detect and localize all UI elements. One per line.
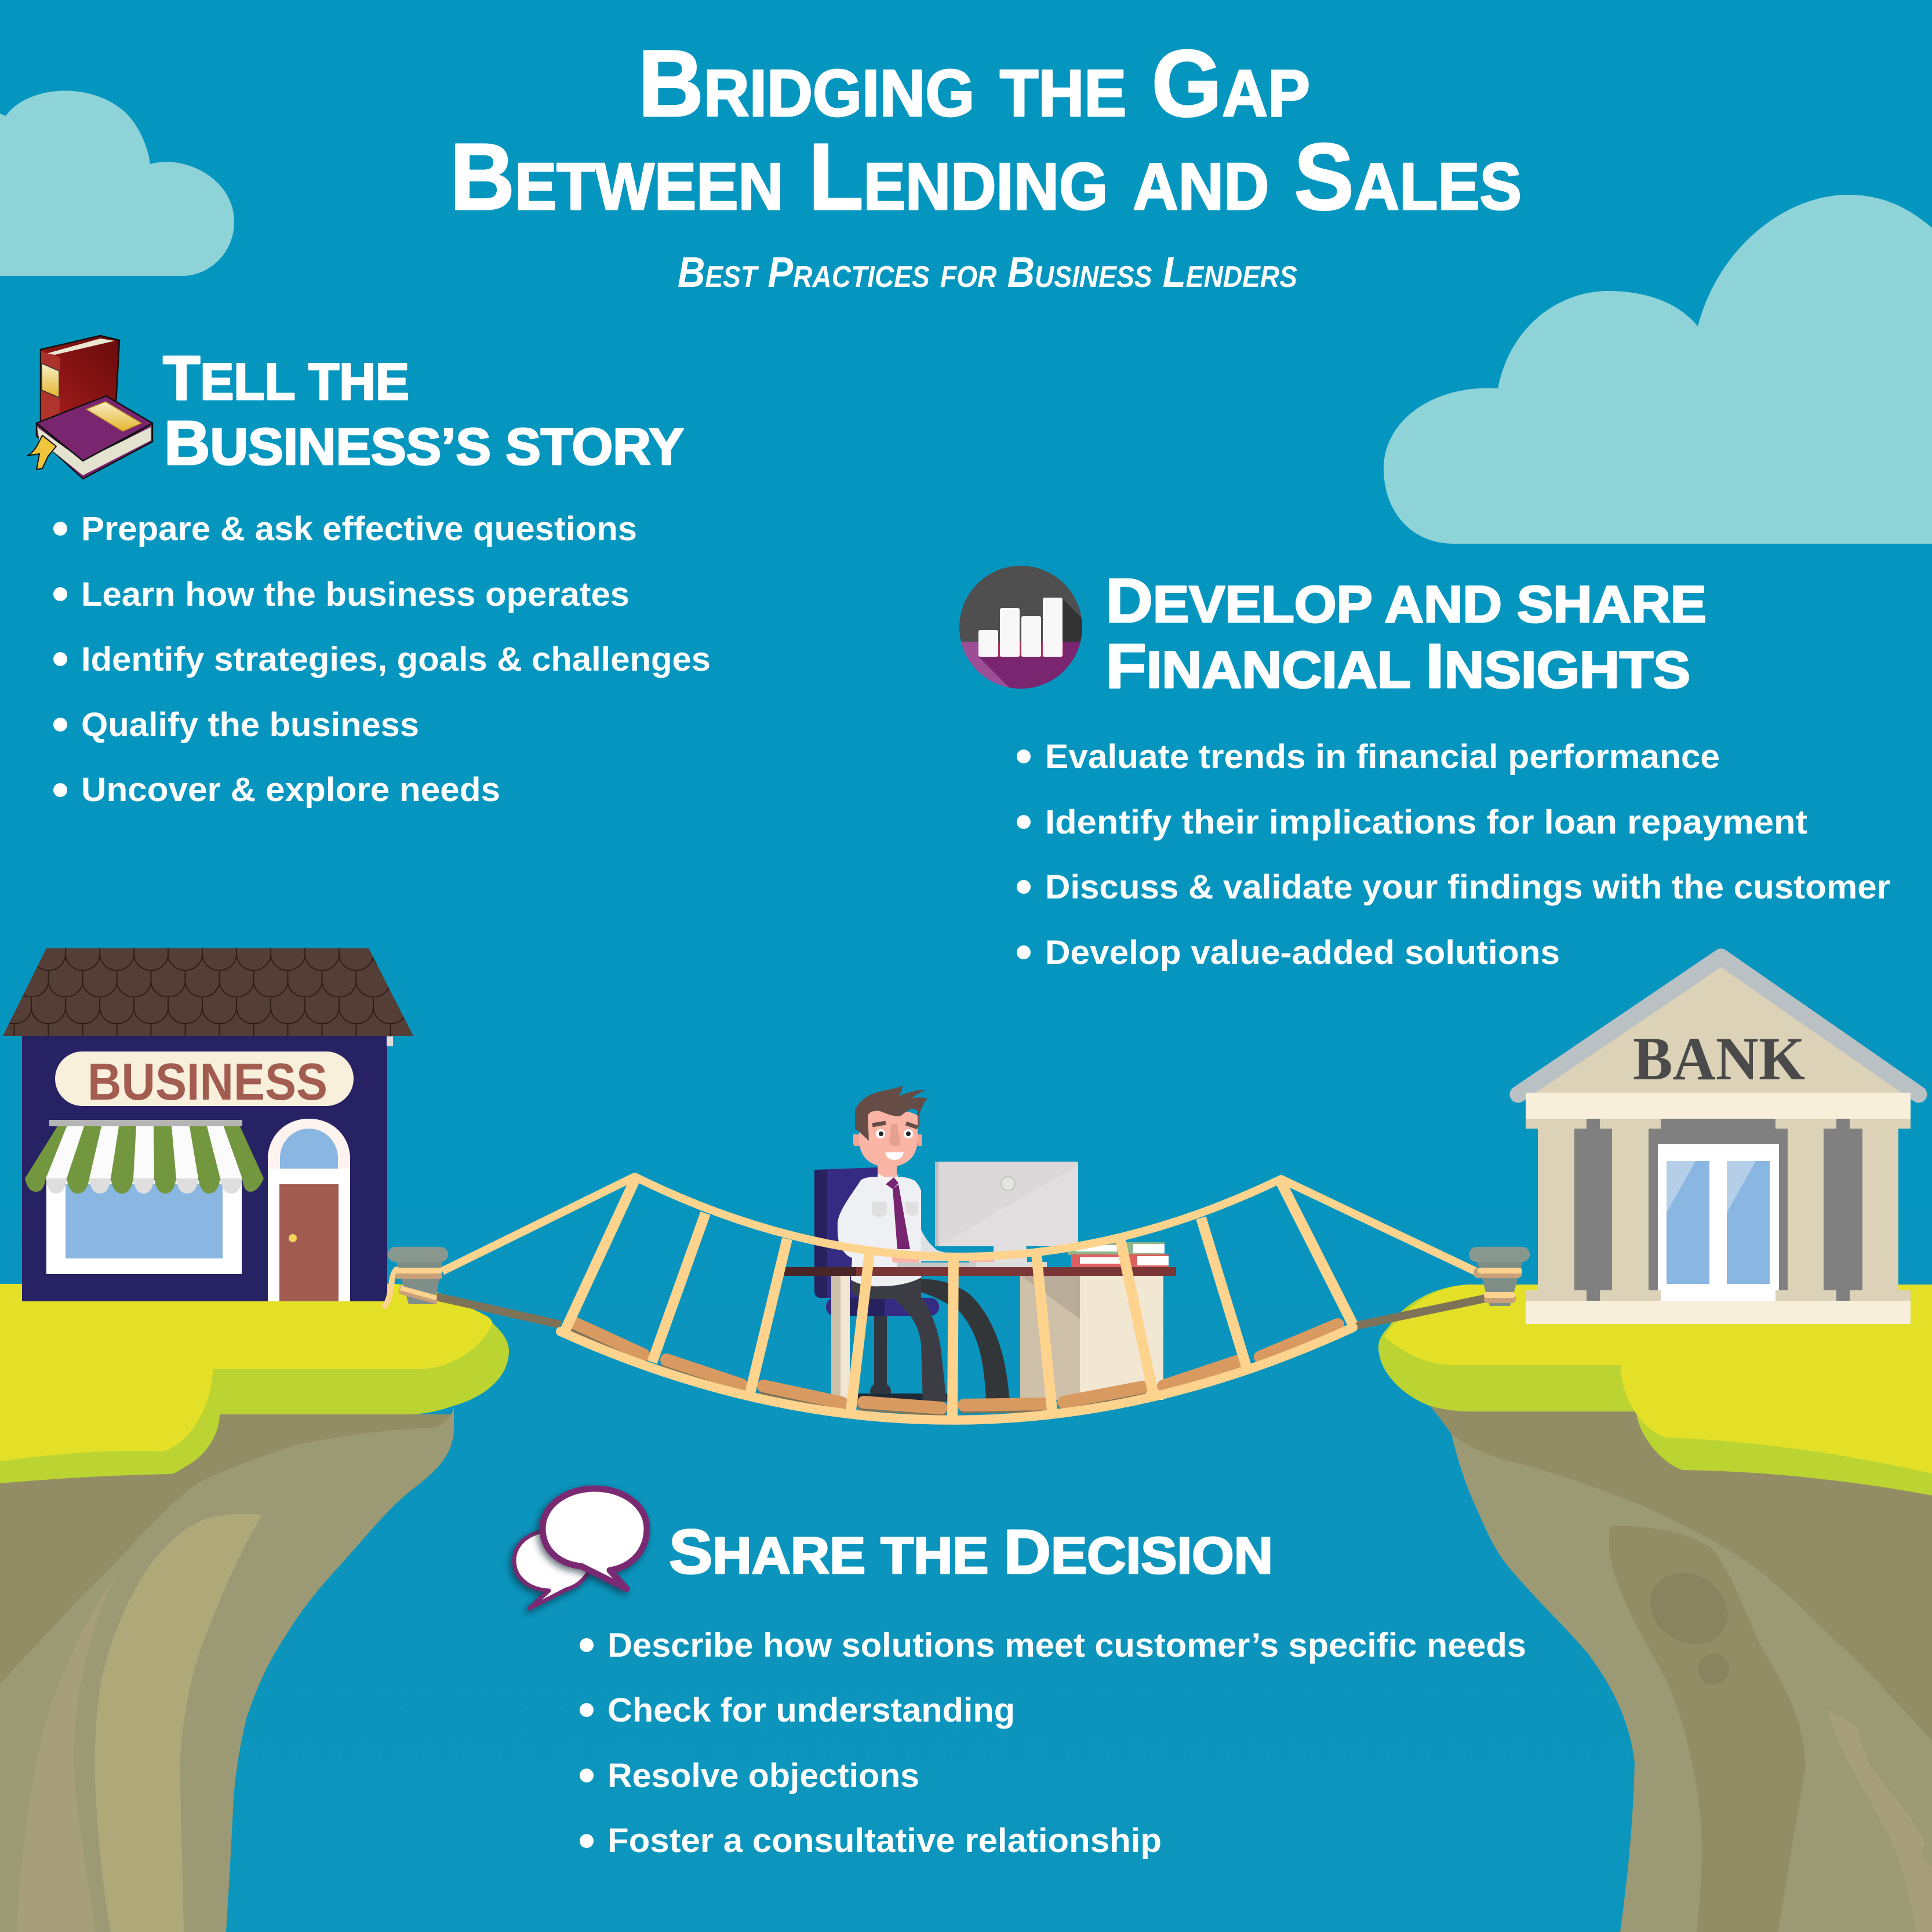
- bullet list: tell the business's story: Learn how the business operates: [81, 576, 630, 613]
- face: [859, 1110, 918, 1167]
- right post bindings: [1473, 1268, 1522, 1303]
- heading: tell the business's story: [163, 343, 684, 478]
- bullet list: share the decision: [580, 1627, 1526, 1860]
- bottom cable: [561, 1327, 1353, 1420]
- bullet list: tell the business's story: Identify strategies, goals & challenges: [81, 641, 711, 678]
- cliff streak: [1828, 1710, 1932, 1932]
- heading: tell the business's story: TELL THE: [163, 343, 409, 413]
- awning: [25, 1120, 264, 1194]
- bullet list: tell the business's story: [53, 510, 711, 809]
- left mooring post: [388, 1247, 448, 1304]
- lower guy ropes: [436, 1297, 1485, 1326]
- dark rock band: [1609, 1526, 1805, 1932]
- books on desk: [1068, 1242, 1169, 1267]
- smile: [885, 1152, 904, 1160]
- base step: [1526, 1301, 1911, 1324]
- icon: speech bubbles: [514, 1489, 647, 1609]
- grass top: [1384, 1285, 1932, 1473]
- heading: tell the business's story: BUSINESS’S STORY: [164, 407, 684, 478]
- bullet list: financial insights: [1017, 738, 1890, 972]
- hands: [892, 1254, 994, 1262]
- tie: [886, 1177, 910, 1249]
- roof: [1518, 957, 1919, 1094]
- subtitle: Best Practices for Business Lenders: [678, 248, 1297, 296]
- hair: [855, 1086, 927, 1141]
- red book: [41, 336, 119, 421]
- right cliff: [1378, 1285, 1932, 1932]
- grass shadow: [1378, 1285, 1932, 1496]
- heading: develop and share financial insights: [1105, 565, 1707, 701]
- shop window: [46, 1180, 242, 1274]
- forearm: [893, 1229, 980, 1261]
- desk pedestal: [1020, 1275, 1163, 1400]
- title: [450, 30, 1522, 230]
- right mooring post: [1469, 1247, 1530, 1306]
- heading: share the decision: SHARE THE DECISION: [669, 1516, 1273, 1587]
- entablature: [1526, 1093, 1911, 1119]
- left post bindings: [385, 1268, 442, 1306]
- cliff highlight: [95, 1514, 262, 1932]
- pockets: [872, 1202, 918, 1218]
- roof: [3, 948, 413, 1036]
- grass shadow: [0, 1284, 509, 1483]
- eyebrows: [872, 1123, 918, 1127]
- shirt: [838, 1177, 921, 1286]
- purple book: [37, 423, 152, 479]
- business building: BUSINESS: [88, 1053, 328, 1111]
- bank sign: BANK: [1633, 1025, 1805, 1093]
- icon: books: [27, 336, 152, 479]
- cloud: top left: [0, 90, 234, 276]
- heading: develop and share financial insights: FINANCIAL INSIGHTS: [1105, 631, 1690, 701]
- rock hole small: [1698, 1654, 1729, 1685]
- bullet list: financial insights: Identify their implications for loan repayment: [1045, 803, 1807, 841]
- title: Bridging the Gap: [638, 30, 1310, 136]
- top cable: [442, 1177, 1475, 1271]
- wall: [22, 1036, 387, 1301]
- heading: develop and share financial insights: DEVELOP AND SHARE: [1105, 565, 1707, 635]
- bullet list: financial insights: Discuss & validate your findings with the customer: [1045, 868, 1890, 906]
- desk top: [784, 1267, 1176, 1276]
- bookmark: [27, 435, 56, 470]
- icon: bar chart circle: [956, 566, 1087, 694]
- rock hole large: [1637, 1559, 1741, 1658]
- bullet list: financial insights: Develop value-added solutions: [1045, 934, 1560, 972]
- grass top: [0, 1284, 492, 1461]
- trousers: [851, 1278, 1010, 1402]
- bullet list: financial insights: Evaluate trends in financial performance: [1045, 738, 1720, 776]
- ears: [853, 1134, 922, 1146]
- cliff lighter face: [0, 1407, 454, 1932]
- pediment: [1522, 960, 1916, 1097]
- bullet list: tell the business's story: Qualify the business: [81, 706, 419, 744]
- business building: [3, 948, 413, 1301]
- cliff rock base: [0, 1414, 454, 1932]
- cloud: top right: [1384, 195, 1932, 544]
- businessman at desk: [784, 1086, 1176, 1402]
- cliff streak: [17, 1577, 115, 1932]
- bank building: [1518, 957, 1919, 1324]
- monitor: [897, 1162, 1078, 1267]
- rope bridge: [385, 1177, 1530, 1421]
- bullet list: share the decision: Check for understanding: [607, 1691, 1015, 1729]
- neck and collar: [878, 1164, 897, 1177]
- left column: [1574, 1119, 1612, 1301]
- bullet list: share the decision: Foster a consultative relationship: [607, 1822, 1162, 1860]
- vertical ropes: [565, 1180, 1353, 1421]
- nose: [889, 1124, 900, 1146]
- chair: [814, 1167, 948, 1402]
- left cliff: [0, 1284, 509, 1932]
- doorway: [1649, 1119, 1788, 1290]
- cliff rock base: [1429, 1406, 1932, 1932]
- cliff lighter face: [1451, 1434, 1932, 1932]
- large bubble: [543, 1489, 647, 1589]
- facade: [1538, 1129, 1898, 1290]
- bullet list: share the decision: Describe how solutions meet customer’s specific needs: [607, 1627, 1526, 1664]
- door: [268, 1119, 350, 1301]
- bullet list: share the decision: Resolve objections: [607, 1757, 919, 1795]
- eyes: [876, 1129, 885, 1138]
- bullet list: tell the business's story: Uncover & explore needs: [81, 771, 500, 809]
- right column: [1824, 1119, 1862, 1301]
- small bubble: [514, 1530, 591, 1609]
- title: Between Lending and Sales: [450, 123, 1522, 230]
- planks: [570, 1322, 1338, 1413]
- bullet list: tell the business's story: Prepare & ask effective questions: [81, 510, 637, 548]
- sign: [55, 1051, 354, 1106]
- desk leg: [831, 1275, 841, 1400]
